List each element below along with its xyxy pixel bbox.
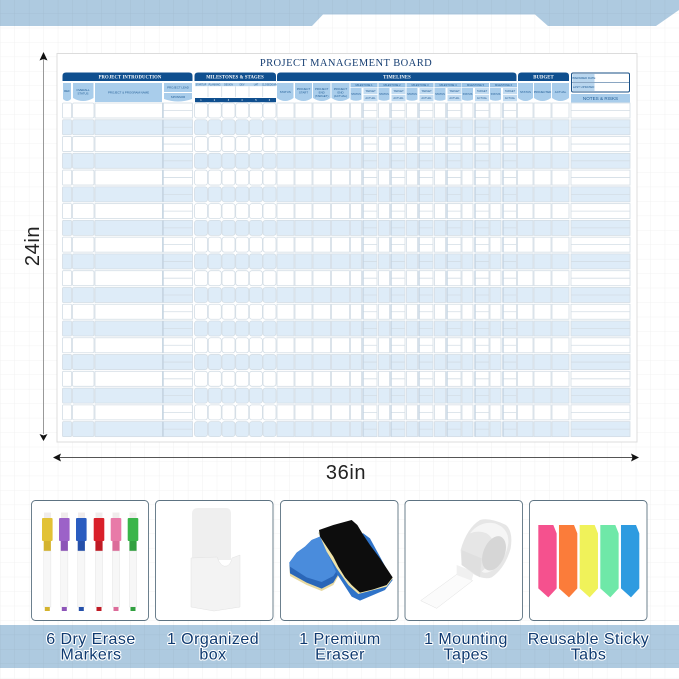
milestone stage headers: 4 — [241, 99, 243, 102]
timeline milestone headers: STATUS — [379, 92, 389, 96]
caption: organized box: 1 Organized — [167, 631, 259, 648]
timeline project date headers: END — [337, 90, 344, 94]
timeline milestone headers: STATUS — [407, 92, 417, 96]
intro column headers — [63, 83, 192, 102]
milestone stage headers: 1 — [200, 99, 202, 102]
milestone stage headers: UAT — [254, 84, 259, 87]
panel: markers — [32, 500, 148, 620]
timeline milestone headers: TARGET — [365, 89, 376, 93]
section heading: milestones and stages — [194, 72, 276, 81]
section heading: project introduction — [62, 72, 192, 81]
icon: purple marker — [59, 512, 70, 611]
budget column headers: PROJECTED — [534, 90, 551, 94]
panel: sticky tabs — [530, 500, 647, 620]
caption: organized box: box — [199, 646, 227, 664]
icon: red marker — [94, 512, 104, 611]
milestone stage headers: 2 — [214, 99, 216, 102]
timeline milestone headers: ACTUAL — [393, 96, 404, 100]
icon: pink marker — [111, 512, 121, 611]
milestone stage headers: CLOSEDOWN — [262, 85, 277, 87]
caption: mounting tapes: Tapes — [444, 646, 488, 664]
timeline milestone headers: MILESTONE 4 — [439, 83, 457, 87]
panel: organizer box — [156, 500, 273, 620]
icon: white pen box — [191, 508, 240, 611]
icon: blue marker — [76, 512, 87, 611]
timeline milestone headers: ACTUAL — [505, 96, 516, 100]
timeline milestone headers: ACTUAL — [421, 96, 432, 100]
board frame — [57, 54, 637, 442]
timeline project date headers: PROJECT — [334, 87, 347, 91]
caption: eraser: 1 Premium — [299, 631, 381, 648]
intro column headers: OVERALL — [76, 88, 90, 92]
milestone stage headers: DEV — [240, 85, 245, 87]
icon: erasers — [289, 520, 393, 601]
board title: PROJECT MANAGEMENT BOARD — [260, 58, 432, 69]
timeline milestone headers: TARGET — [393, 89, 404, 93]
notes and risks header — [571, 94, 630, 102]
timeline project date headers: (ACTUAL) — [334, 94, 347, 98]
height label: 24in — [22, 226, 44, 266]
height arrow — [40, 52, 48, 441]
timeline milestone headers: MILESTONE 6 — [495, 83, 513, 87]
section heading: milestones and stages: MILESTONES & STAGES — [206, 76, 264, 81]
timeline project date headers: END — [319, 90, 325, 94]
timeline project date headers: PROJECT — [297, 87, 310, 91]
timeline project date headers: (TARGET) — [315, 94, 328, 98]
timeline milestone headers: MILESTONE 2 — [383, 83, 401, 87]
timeline milestone headers: TARGET — [505, 89, 516, 93]
timeline milestone headers: ACTUAL — [477, 96, 488, 100]
width arrow — [53, 454, 639, 462]
budget column headers: STATUS — [520, 90, 531, 94]
milestone stage headers: 3 — [228, 99, 230, 102]
timeline milestone headers: MILESTONE 3 — [411, 83, 429, 87]
caption: markers: Markers — [61, 646, 121, 664]
caption band — [0, 625, 679, 668]
icon: yellow marker — [42, 512, 53, 611]
notes and risks header: NOTES & RISKS — [583, 96, 618, 101]
timeline milestone headers: STATUS — [435, 92, 445, 96]
icon: green marker — [128, 512, 138, 611]
timeline milestone headers: TARGET — [477, 89, 488, 93]
timeline project date headers — [277, 83, 350, 101]
caption: eraser: Eraser — [315, 646, 365, 664]
section heading: timelines — [277, 72, 516, 81]
date box: PREPARED DATE — [572, 76, 596, 80]
intro column headers: PROJECT & PROGRAM NAME — [108, 90, 149, 94]
timeline milestone headers: ACTUAL — [365, 96, 376, 100]
timeline milestone headers: TARGET — [421, 89, 432, 93]
panel: eraser — [280, 500, 398, 620]
milestone stage headers — [195, 83, 277, 102]
timeline milestone headers: STATUS — [491, 92, 501, 96]
caption: markers: 6 Dry Erase — [46, 631, 136, 648]
top decorative band — [0, 0, 679, 26]
width label: 36in — [326, 462, 366, 484]
board — [57, 54, 637, 442]
timeline milestone headers: MILESTONE 1 — [355, 83, 373, 87]
timeline milestone headers: ACTUAL — [449, 96, 460, 100]
intro column headers: SPONSOR — [171, 95, 185, 99]
timeline milestone headers: MILESTONE 5 — [467, 83, 485, 87]
timeline milestone headers: TARGET — [449, 89, 460, 93]
date box — [572, 73, 630, 92]
milestone stage headers: STARTUP — [196, 84, 207, 87]
section heading: timelines: TIMELINES — [383, 76, 411, 81]
caption: mounting tapes: 1 Mounting — [424, 631, 508, 648]
milestone stage headers: 6 — [269, 99, 271, 102]
intro column headers: PROJECT LEAD — [167, 86, 189, 90]
milestone stage headers: PLANNING — [209, 84, 221, 87]
timeline milestone headers: STATUS — [463, 92, 473, 96]
timeline project date headers: STATUS — [280, 90, 291, 94]
timeline milestone headers: STATUS — [351, 92, 361, 96]
timeline milestone headers — [350, 83, 517, 101]
caption: sticky tabs: Reusable Sticky — [528, 631, 649, 648]
budget column headers: ACTUAL — [555, 90, 567, 94]
icon: tape roll — [421, 519, 511, 608]
timeline project date headers: START — [299, 90, 308, 94]
icon: sticky tabs — [538, 525, 639, 597]
section heading: budget — [518, 72, 569, 81]
milestone stage headers: DESIGN — [224, 85, 233, 87]
intro column headers: STATUS — [78, 92, 89, 96]
panel: mounting tape — [405, 500, 522, 620]
budget column headers — [518, 83, 569, 101]
section heading: project introduction: PROJECT INTRODUCTION — [99, 76, 162, 81]
caption: sticky tabs: Tabs — [571, 646, 606, 664]
table rows — [62, 103, 630, 437]
timeline project date headers: PROJECT — [315, 87, 329, 91]
date box: LAST UPDATED — [573, 85, 594, 89]
section heading: budget: BUDGET — [533, 76, 555, 81]
intro column headers: REF — [64, 89, 70, 93]
milestone stage headers: 5 — [255, 99, 257, 102]
